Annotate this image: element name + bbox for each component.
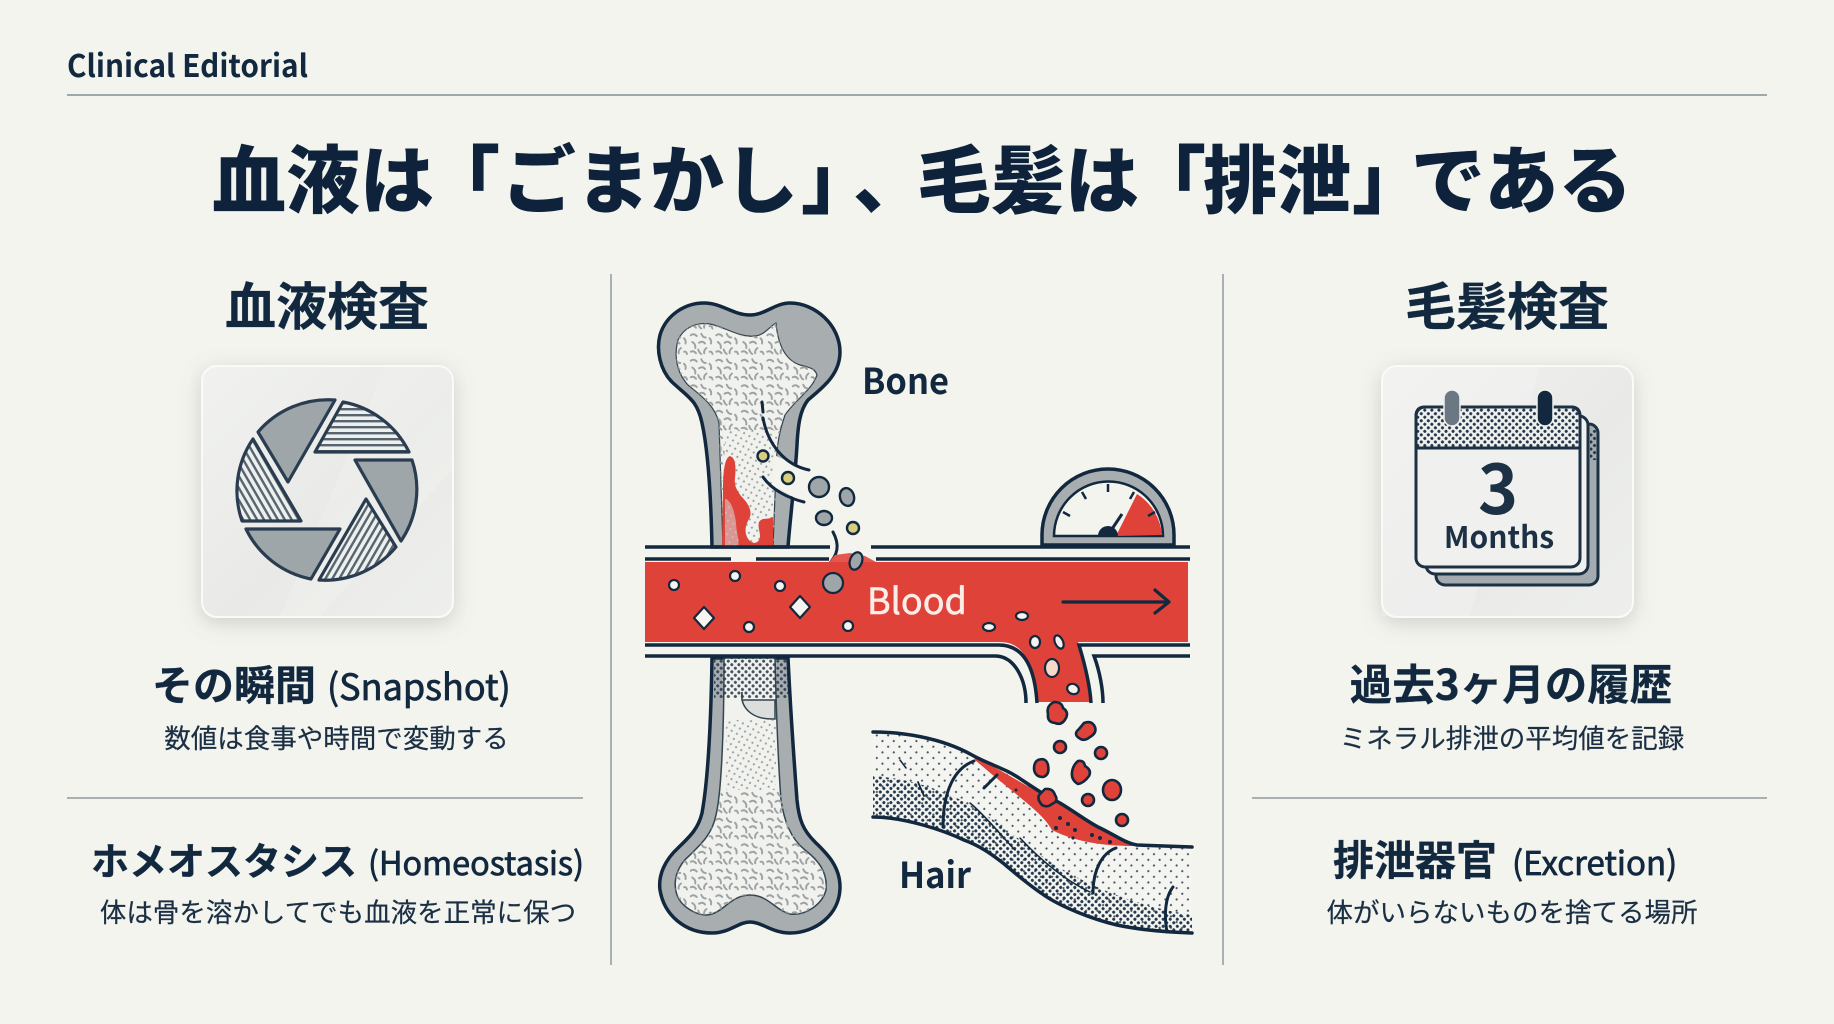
title: 毛髪は bbox=[917, 122, 1139, 229]
text: three month history heading: 過去3ヶ月の履歴 bbox=[1350, 652, 1672, 713]
title: ごまかし bbox=[502, 122, 798, 229]
title: である bbox=[1411, 122, 1632, 229]
text: excretion heading: (Excretion) bbox=[1512, 837, 1677, 885]
title: 」 bbox=[1352, 122, 1426, 229]
text: 3: 3 bbox=[1478, 435, 1518, 534]
bone lower bbox=[660, 658, 840, 933]
heading: blood test: 血液検査 bbox=[225, 266, 429, 340]
title: 「 bbox=[1132, 122, 1206, 229]
text: Months: Months bbox=[1444, 513, 1554, 557]
blood seeping into bone bbox=[722, 456, 773, 547]
panel: bone, blood and hair diagram bbox=[645, 303, 1192, 933]
heading: hair test: 毛髪検査 bbox=[1405, 266, 1609, 340]
fracture opening in bone wall bbox=[772, 455, 812, 503]
gauge bbox=[1042, 469, 1174, 545]
panel: blood test bbox=[67, 266, 584, 930]
text: snapshot heading: その瞬間 bbox=[152, 652, 316, 712]
panel: hair test bbox=[1252, 266, 1767, 930]
icon: camera aperture bbox=[237, 400, 417, 580]
label: Blood: Blood bbox=[867, 573, 967, 625]
text: snapshot heading: (Snapshot) bbox=[327, 659, 511, 711]
bone upper bbox=[658, 303, 859, 565]
hair outline bbox=[873, 732, 1192, 933]
text: excretion heading: 排泄器官 bbox=[1333, 827, 1497, 887]
mineral drops falling to hair bbox=[1034, 702, 1128, 826]
text: history description: ミネラル排泄の平均値を記録 bbox=[1340, 717, 1684, 756]
particles in blood bbox=[669, 550, 1081, 696]
red mineral deposit on hair bbox=[974, 757, 1137, 846]
text: homeostasis heading: ホメオスタシス bbox=[91, 831, 357, 886]
label: Bone: Bone bbox=[862, 353, 949, 405]
text: snapshot description: 数値は食事や時間で変動する bbox=[164, 717, 509, 756]
text: homeostasis heading: (Homeostasis) bbox=[368, 838, 584, 885]
blood vessel bbox=[645, 547, 1190, 703]
icon: three month calendar bbox=[1416, 390, 1598, 585]
title: 」 bbox=[801, 122, 875, 229]
title: 血液は bbox=[212, 122, 434, 229]
arrow: blood flow bbox=[1063, 590, 1169, 613]
hair shaft bbox=[873, 732, 1192, 933]
title: 排泄 bbox=[1203, 122, 1351, 229]
card: calendar icon bbox=[1382, 366, 1633, 617]
title: 「 bbox=[426, 122, 500, 229]
text: excretion description: 体がいらないものを捨てる場所 bbox=[1326, 891, 1698, 930]
title: 、 bbox=[853, 122, 927, 229]
text: homeostasis description: 体は骨を溶かしてでも血液を正常に保つ bbox=[100, 891, 576, 930]
label: Hair: Hair bbox=[899, 847, 971, 899]
header label: Clinical Editorial bbox=[67, 41, 308, 86]
mineral fragments leaving bone bbox=[762, 402, 837, 565]
card: aperture icon bbox=[202, 366, 453, 617]
